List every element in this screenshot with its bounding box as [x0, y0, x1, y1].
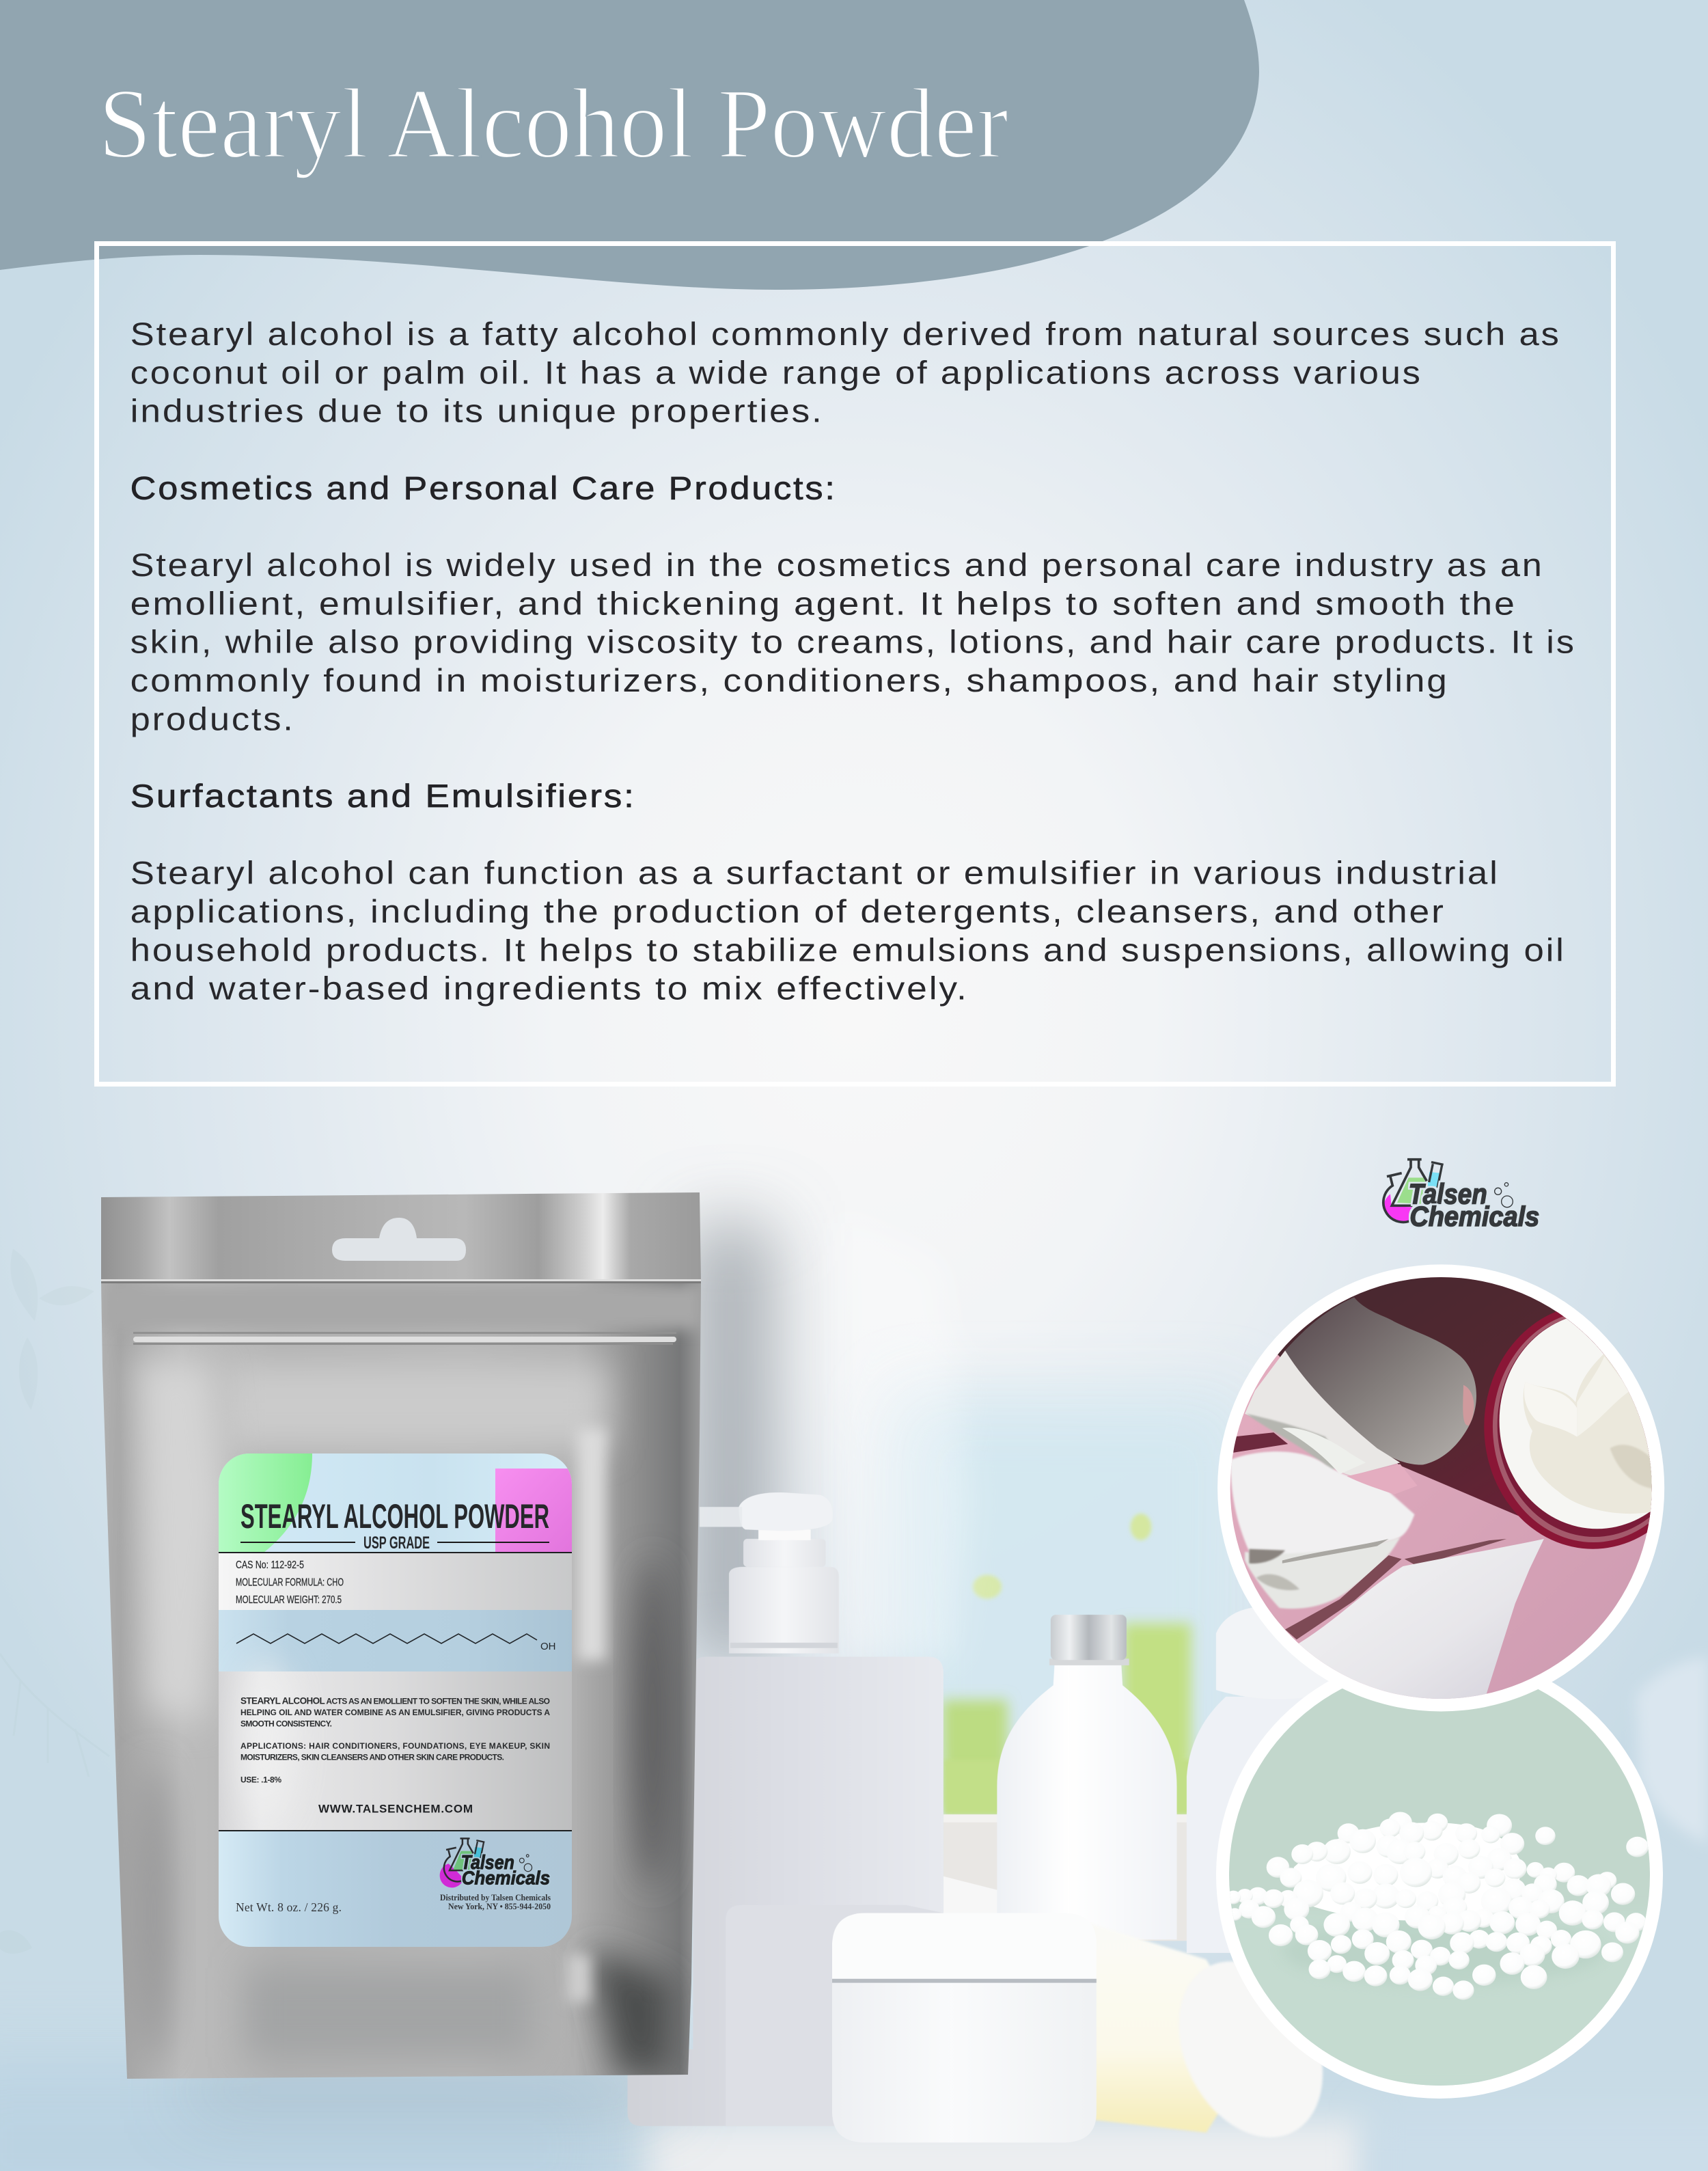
description text block: Cosmetics and Personal Care Products: [130, 469, 837, 506]
circle photo: cream on pink surface [1217, 1264, 1701, 1711]
structural formula: OH [540, 1641, 556, 1652]
description text block: Stearyl alcohol is widely used in the cosmetics and personal care industry as an [130, 547, 1544, 583]
description text block: Stearyl alcohol can function as a surfactant or emulsifier in various industrial [130, 855, 1500, 891]
faint botanical decoration [0, 1251, 109, 1953]
foil pouch [96, 1189, 711, 2080]
lying tube [1088, 1923, 1351, 2163]
label description: SMOOTH CONSISTENCY. [240, 1719, 332, 1729]
pouch top seal [96, 1189, 711, 1281]
pellet ground shadow [1282, 1917, 1604, 1985]
label chemical data: MOLECULAR FORMULA: CHO [236, 1577, 344, 1588]
label logo [440, 1838, 550, 1889]
brand logo: Chemicals [1409, 1201, 1539, 1232]
description text block: Stearyl alcohol is a fatty alcohol commonly derived from natural sources such as [130, 316, 1561, 352]
distributor details: Distributed by Talsen Chemicals [440, 1892, 551, 1902]
glass bottle [997, 1615, 1177, 1939]
brand logo: Talsen [1409, 1178, 1487, 1210]
floor surface [0, 2057, 1708, 2171]
large white smear left [1230, 1451, 1414, 1557]
distributor details: New York, NY • 855-944-2050 [448, 1901, 551, 1911]
label logo: Talsen [461, 1852, 514, 1874]
label description: USE: .1-8% [240, 1775, 281, 1785]
window view with blurred greenery [892, 1394, 1245, 1946]
net weight: Net Wt. 8 oz. / 226 g. [236, 1900, 342, 1914]
pink opening [1347, 1464, 1418, 1494]
description text block: industries due to its unique properties. [130, 393, 824, 429]
product label [219, 1453, 572, 1947]
text frame panel [97, 243, 1614, 1084]
label description: MOISTURIZERS, SKIN CLEANSERS AND OTHER SKIN CARE PRODUCTS. [240, 1752, 504, 1762]
structural formula [236, 1634, 556, 1652]
label title: STEARYL ALCOHOL POWDER [240, 1497, 549, 1535]
cream jar [1484, 1305, 1701, 1549]
description text block: coconut oil or palm oil. It has a wide range of applications across various [130, 354, 1422, 390]
left maroon streak [1233, 1432, 1288, 1453]
description text block: products. [130, 700, 295, 737]
label structure band [219, 1610, 572, 1671]
circle photo: stearyl alcohol pellets [1216, 1652, 1663, 2099]
description text block: skin, while also providing viscosity to creams, lotions, and hair care products. It is [130, 624, 1576, 660]
label website: WWW.TALSENCHEM.COM [318, 1803, 473, 1815]
hang hole [332, 1218, 466, 1261]
lower left cream fold [1245, 1538, 1400, 1609]
pouch body foil [96, 1281, 711, 2080]
distributor details [440, 1892, 551, 1911]
cream jar [832, 1913, 1097, 2142]
white cream ridge [1245, 1350, 1400, 1475]
description text block: Surfactants and Emulsifiers: [130, 778, 636, 814]
label logo: Chemicals [462, 1867, 550, 1889]
soft blob right side [1636, 1657, 1708, 1845]
large white smear bottom [1298, 1539, 1544, 1704]
sheer curtain [834, 1207, 971, 1660]
title: Stearyl Alcohol Powder [98, 68, 1008, 179]
pouch zip ridge [133, 1332, 676, 1345]
label subtitle with rules: USP GRADE [363, 1533, 430, 1553]
label green accent [219, 1453, 312, 1553]
label chemical data: CAS No: 112-92-5 [236, 1559, 304, 1571]
description text block: emollient, emulsifier, and thickening agent. It helps to soften and smooth the [130, 585, 1517, 621]
description text block: and water-based ingredients to mix effectively. [130, 970, 969, 1007]
label chemical data [236, 1559, 344, 1606]
upper shaded cream smear [1285, 1297, 1476, 1464]
description text block: commonly found in moisturizers, conditioners, shampoos, and hair styling [130, 662, 1449, 698]
maroon crack streaks [1285, 1555, 1401, 1639]
maroon surface shadow [1273, 1273, 1659, 1523]
label description: HELPING OIL AND WATER COMBINE AS AN EMULSIFIER, GIVING PRODUCTS A [240, 1708, 550, 1717]
bag cast shadow [191, 1223, 772, 2105]
pellet pile [1226, 1812, 1649, 2000]
label description: APPLICATIONS: HAIR CONDITIONERS, FOUNDATIONS, EYE MAKEUP, SKIN [240, 1741, 550, 1751]
label pink accent [495, 1469, 572, 1553]
pump bottle [628, 1492, 943, 2126]
header wave shape [0, 0, 1259, 290]
brand logo [1383, 1160, 1539, 1232]
description text block: applications, including the production of detergents, cleansers, and other [130, 893, 1446, 929]
cosmetics bottles scene [628, 1207, 1351, 2163]
spray bottle [1187, 1607, 1330, 1953]
description text block: household products. It helps to stabilize emulsions and suspensions, allowing oil [130, 931, 1566, 968]
label chemical data: MOLECULAR WEIGHT: 270.5 [236, 1594, 342, 1606]
label description [240, 1696, 550, 1785]
label description: STEARYL ALCOHOL ACTS AS AN EMOLLIENT TO SOFTEN THE SKIN, WHILE ALSO [240, 1696, 550, 1706]
description text block [130, 316, 1576, 1007]
